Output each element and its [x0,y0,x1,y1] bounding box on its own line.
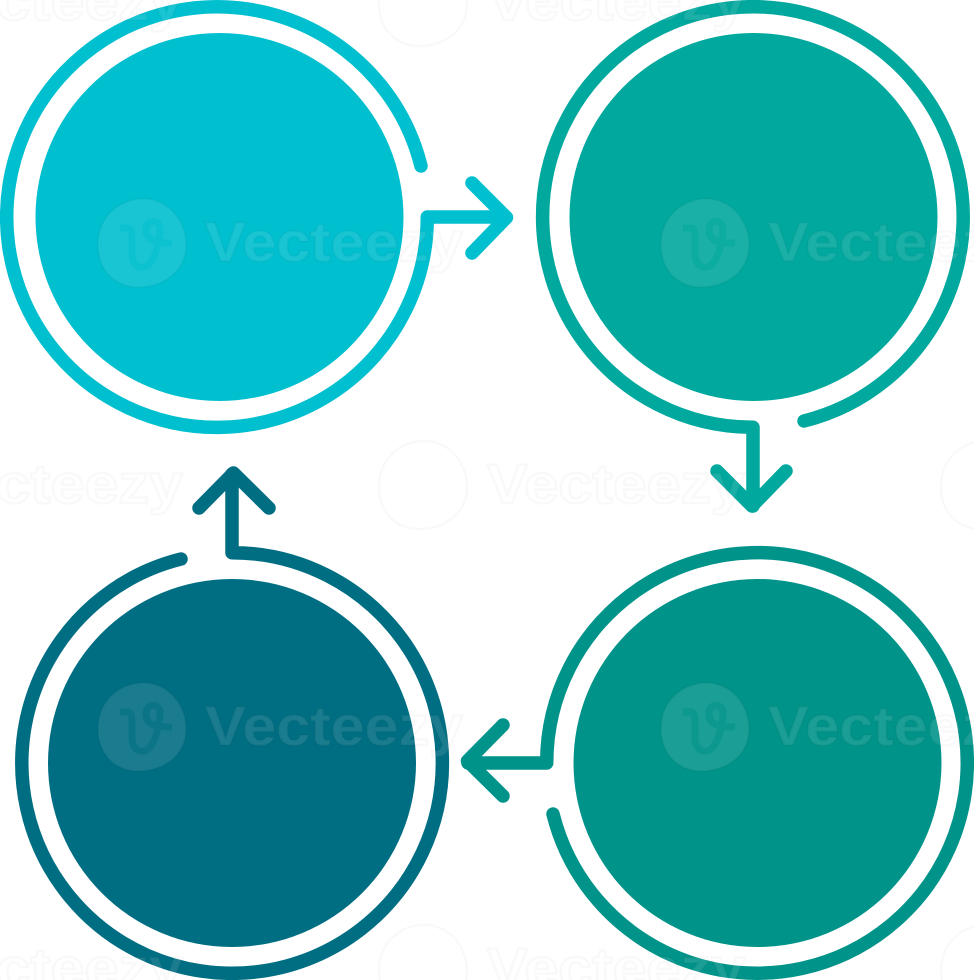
watermark row: upper: Vecteezy [205,210,463,273]
watermark row: top [126,0,742,21]
step 1: cyan circle [7,7,507,427]
step 2: teal circle [543,7,963,506]
watermark row: lower [98,683,974,771]
watermark row: middle [712,474,740,498]
watermark row: middle: Vecteezy [487,452,745,515]
watermark row: lower: Vecteezy [205,694,463,757]
step 3: dark teal circle [468,553,967,973]
watermark row: upper [98,199,974,287]
step 4: deep blue circle [22,473,442,973]
watermark row: bottom [136,957,741,979]
